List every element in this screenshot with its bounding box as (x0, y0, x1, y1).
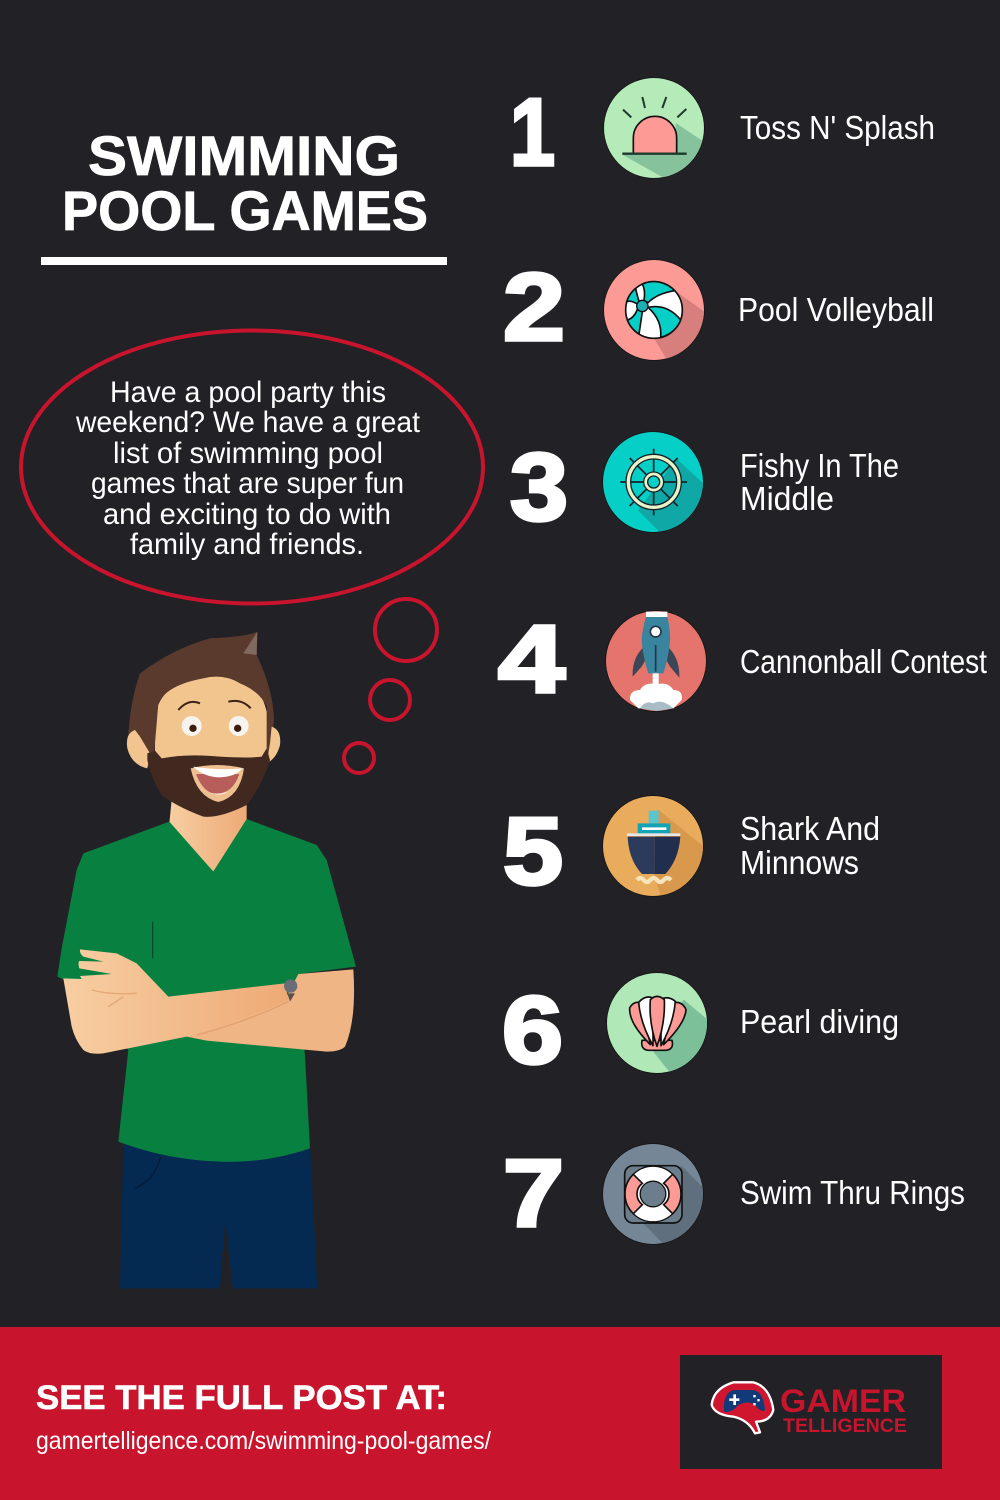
label 3: Middle (740, 480, 834, 517)
speech bubble: Have a pool party this (110, 376, 386, 409)
icon: ship wheel (602, 432, 704, 532)
icon: alarm light (603, 78, 704, 178)
speech bubble: family and friends. (130, 528, 364, 561)
label 2: Pool Volleyball (738, 291, 934, 328)
icon: ship (602, 796, 704, 896)
footer call to action: SEE THE FULL POST AT: (36, 1379, 447, 1417)
icon: sea shell (606, 972, 708, 1074)
logo wordmark: GAMER (780, 1383, 906, 1419)
logo wordmark (780, 1383, 907, 1437)
number 6: 6 (502, 977, 563, 1084)
icon: beach ball (603, 260, 704, 360)
speech bubble: games that are super fun (91, 467, 404, 500)
speech bubble: list of swimming pool (113, 437, 383, 470)
speech bubble: weekend? We have a great (75, 406, 421, 439)
man with crossed arms (57, 632, 356, 1288)
number 7: 7 (503, 1140, 564, 1247)
icon: rocket (605, 610, 707, 712)
label 3 (740, 447, 899, 517)
label 1: Toss N' Splash (740, 109, 935, 146)
logo (680, 1355, 942, 1469)
icon: life ring (602, 1144, 704, 1244)
speech bubble: and exciting to do with (103, 498, 391, 531)
label 3: Fishy In The (740, 447, 899, 484)
label 5 (740, 810, 880, 881)
logo wordmark: TELLIGENCE (783, 1416, 907, 1437)
speech bubble (21, 330, 483, 604)
thought bubbles (344, 599, 437, 773)
number 1: 1 (510, 79, 555, 186)
footer url: gamertelligence.com/swimming-pool-games/ (36, 1427, 491, 1455)
icon: brain controller (712, 1382, 773, 1433)
label 5: Shark And (740, 810, 880, 847)
title: SWIMMING (88, 124, 400, 187)
title (41, 124, 447, 265)
label 6: Pearl diving (740, 1003, 899, 1040)
number 4: 4 (498, 606, 565, 713)
label 7: Swim Thru Rings (740, 1174, 965, 1211)
title: POOL GAMES (62, 179, 428, 242)
number 3: 3 (510, 434, 568, 541)
number 5: 5 (503, 798, 563, 905)
number 2: 2 (503, 254, 565, 361)
label 5: Minnows (740, 844, 859, 881)
footer band (0, 1327, 1000, 1500)
